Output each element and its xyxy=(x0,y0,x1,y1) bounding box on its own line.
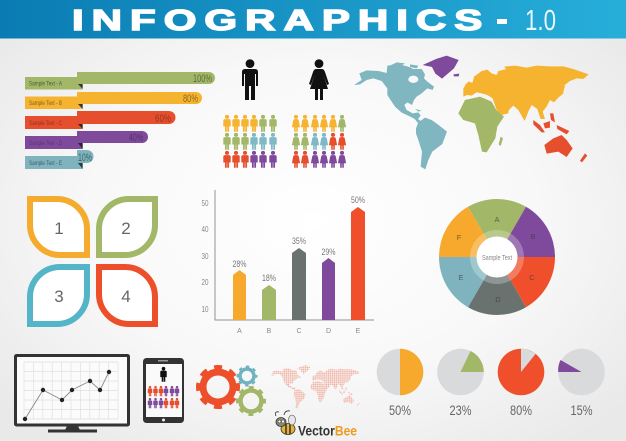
tablet people rows xyxy=(148,386,179,408)
ribbon C 60% xyxy=(25,111,176,129)
ribbon E 10%: 10% xyxy=(78,152,92,164)
bar C xyxy=(292,236,306,335)
red gear xyxy=(198,367,238,407)
teal gear xyxy=(238,366,256,386)
ribbon D 40% xyxy=(25,131,148,149)
ribbon D 40%: Sample Text - D xyxy=(29,141,63,147)
segment letters: B xyxy=(530,232,536,241)
ribbon B 80%: 80% xyxy=(183,93,198,105)
segment letters: E xyxy=(458,273,464,282)
segment letters: A xyxy=(494,215,500,224)
donut chart xyxy=(439,199,555,315)
bar E xyxy=(351,195,365,335)
world map xyxy=(354,56,589,169)
ribbon C 60%: 60% xyxy=(155,113,171,125)
segment B xyxy=(497,207,555,257)
segment letters: D xyxy=(495,295,501,304)
y axis labels: 20 xyxy=(202,278,209,287)
y axis labels: 50 xyxy=(202,199,209,208)
ribbon A 100%: Sample Text - A xyxy=(29,82,62,88)
bar C: C xyxy=(296,328,302,335)
pie chart 50%: 50% xyxy=(389,402,411,418)
ribbon A 100% xyxy=(25,72,215,90)
leaf 4: 4 xyxy=(121,287,131,306)
inner ring xyxy=(470,230,524,284)
numbered leaf panels xyxy=(30,199,155,324)
bar A: A xyxy=(237,328,242,335)
centre label: Sample Text xyxy=(482,255,512,262)
VectorBee logo xyxy=(275,411,357,438)
leaf 3: 3 xyxy=(54,287,64,306)
greenland xyxy=(423,56,459,79)
segment F xyxy=(439,207,497,257)
ribbon E 10%: Sample Text - E xyxy=(29,161,62,167)
header banner xyxy=(0,0,626,38)
pie chart 80%: 80% xyxy=(510,402,532,418)
bar E: 50% xyxy=(351,195,365,205)
bar D xyxy=(322,247,336,335)
ribbon E 10% xyxy=(25,150,94,169)
people grid: women xyxy=(292,115,346,168)
bar D: D xyxy=(326,328,331,335)
pie chart 80% xyxy=(498,349,544,418)
south america xyxy=(416,118,447,169)
percentage ribbon bars xyxy=(25,72,215,169)
y axis labels xyxy=(202,199,209,314)
segment A xyxy=(468,199,526,257)
green gear xyxy=(238,388,264,414)
y axis labels: 40 xyxy=(202,225,209,234)
y axis labels: 10 xyxy=(202,305,209,314)
segment C xyxy=(497,257,555,307)
leaf 1: 1 xyxy=(54,219,64,238)
segment E xyxy=(439,257,497,307)
eurasia xyxy=(463,66,589,121)
title dash xyxy=(497,19,507,24)
people grid: men xyxy=(223,115,277,168)
bar chart xyxy=(202,190,374,335)
bar D: 29% xyxy=(322,247,336,257)
segment letters: F xyxy=(457,233,462,242)
logo wordmark: VectorBee xyxy=(298,424,357,438)
bar B xyxy=(262,273,276,335)
version number: 1.0 xyxy=(525,5,556,37)
tablet with people xyxy=(143,358,184,423)
bar B: 18% xyxy=(262,273,276,283)
pie chart 50% xyxy=(377,349,423,418)
north america xyxy=(354,62,434,123)
pie chart 15%: 15% xyxy=(570,402,592,418)
pie chart 15% xyxy=(558,349,605,418)
ribbon A 100%: 100% xyxy=(193,73,212,85)
ribbon D 40%: 40% xyxy=(129,132,143,144)
tablet man icon xyxy=(160,367,167,382)
ribbon C 60%: Sample Text - C xyxy=(29,121,63,127)
bar B: B xyxy=(267,328,272,335)
dotted world map xyxy=(270,365,360,409)
segment letters: C xyxy=(529,273,535,282)
y axis labels: 30 xyxy=(202,252,209,261)
chart grid xyxy=(24,362,118,419)
icon: woman xyxy=(309,59,329,100)
line series xyxy=(23,370,111,421)
bar C: 35% xyxy=(292,236,306,246)
bar A xyxy=(232,259,246,335)
pie chart 23% xyxy=(437,349,484,418)
segment letters xyxy=(457,215,536,304)
title: INFOGRAPHICS xyxy=(72,4,482,36)
icon: bee xyxy=(275,411,296,434)
ribbon B 80% xyxy=(25,92,202,109)
africa xyxy=(458,97,504,152)
pie chart 23%: 23% xyxy=(450,402,472,418)
leaf 2: 2 xyxy=(121,219,131,238)
icon: man xyxy=(242,59,258,100)
ribbon B 80%: Sample Text - B xyxy=(29,101,62,107)
bar E: E xyxy=(356,328,361,335)
monitor with line chart xyxy=(16,356,128,432)
bar A: 28% xyxy=(232,259,246,269)
segment D xyxy=(468,257,526,315)
gears icon xyxy=(198,366,264,414)
oceania xyxy=(533,113,587,162)
